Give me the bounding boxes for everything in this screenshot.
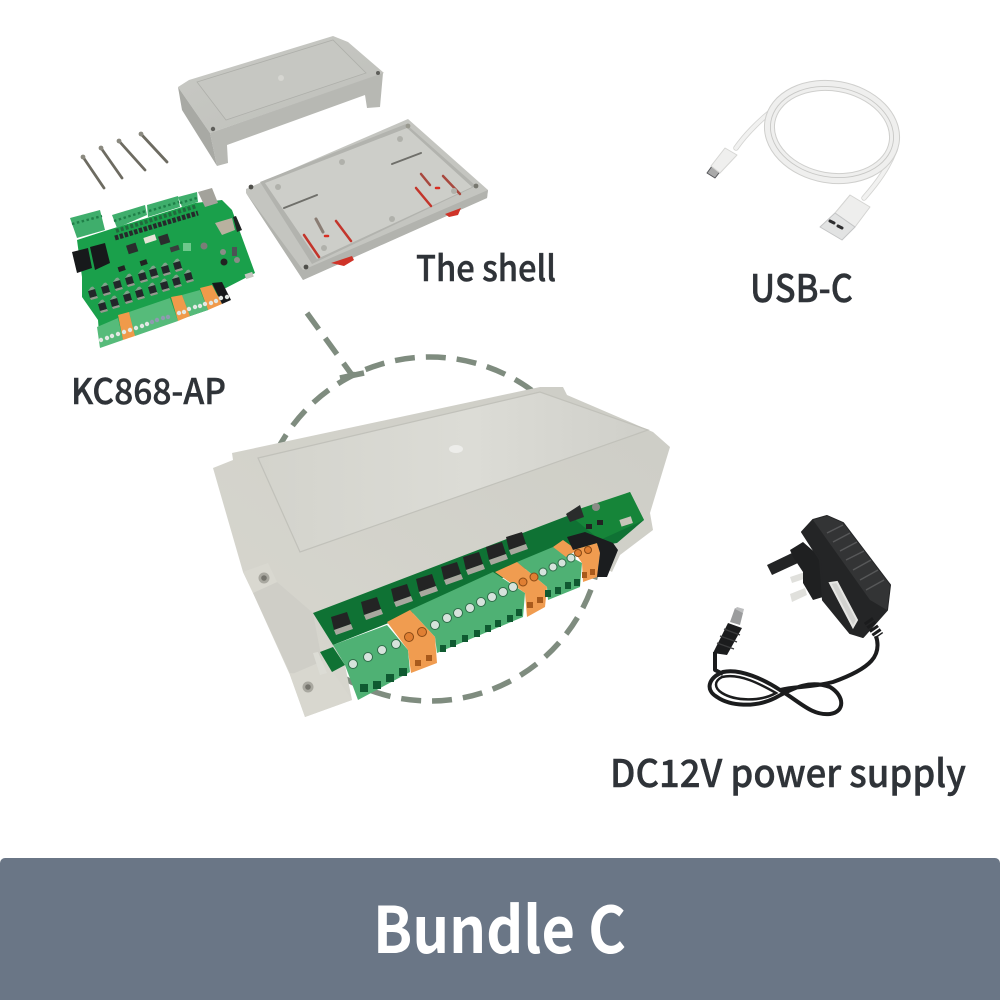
relays	[72, 248, 92, 273]
panel: shell lid	[178, 36, 384, 166]
second cable strand	[716, 676, 776, 699]
panel: assembled controller	[213, 387, 670, 717]
product label	[830, 582, 857, 627]
pale prongs	[790, 572, 807, 583]
usb contacts	[830, 221, 842, 228]
plug collar	[790, 542, 827, 600]
wifi module	[215, 218, 235, 235]
green terminal blocks	[333, 625, 410, 700]
board parts	[566, 505, 584, 522]
terminal screws	[348, 554, 575, 668]
panel: shell base tray	[246, 119, 488, 280]
cable legs	[736, 88, 805, 148]
DC plug	[713, 623, 742, 655]
header rows	[115, 213, 198, 238]
left wall	[253, 582, 325, 675]
black terminal	[212, 282, 231, 304]
label: DC12V power supply: DC12V power supply	[610, 743, 966, 798]
upper flange	[243, 563, 277, 593]
relay mosfets	[331, 612, 353, 635]
top panel	[258, 392, 648, 552]
terminal screws	[99, 295, 229, 342]
panel: USB-C cable	[707, 76, 902, 240]
case body	[213, 387, 670, 717]
panel: KC868-AP circuit board	[70, 188, 255, 348]
icon: four screws	[81, 132, 167, 188]
ribs	[827, 525, 884, 590]
red clips	[331, 256, 354, 266]
terminal sockets	[360, 579, 580, 692]
panel: DC12V power adapter	[710, 516, 890, 714]
cable	[710, 636, 878, 714]
top terminal strips	[70, 210, 105, 238]
black terminal block	[567, 532, 618, 577]
top dimple	[449, 445, 463, 453]
interior PCB	[313, 492, 644, 645]
metal bracket	[313, 652, 327, 675]
footer banner	[0, 858, 1000, 1000]
main prong	[767, 553, 798, 575]
lower flange	[290, 660, 352, 717]
mounting holes	[258, 572, 270, 584]
body	[802, 516, 890, 637]
cable coil	[762, 76, 902, 188]
USB-C head	[707, 162, 723, 178]
terminal shading	[72, 198, 197, 224]
tray slots	[284, 153, 460, 257]
bottom green terminals	[97, 318, 123, 348]
heading: Bundle C: Bundle C	[373, 880, 626, 972]
label: KC868-AP: KC868-AP	[71, 364, 226, 415]
board body	[77, 200, 255, 347]
callout: dashed ring and leader	[258, 313, 602, 701]
strain relief	[868, 620, 879, 636]
usb jack	[198, 188, 218, 207]
orange terminals	[118, 312, 135, 340]
orange terminal blocks	[387, 610, 437, 673]
mosfet rows	[173, 258, 183, 272]
label: The shell: The shell	[416, 241, 556, 292]
label: USB-C: USB-C	[750, 258, 853, 313]
USB-A plug	[835, 195, 870, 227]
chips	[126, 243, 138, 254]
